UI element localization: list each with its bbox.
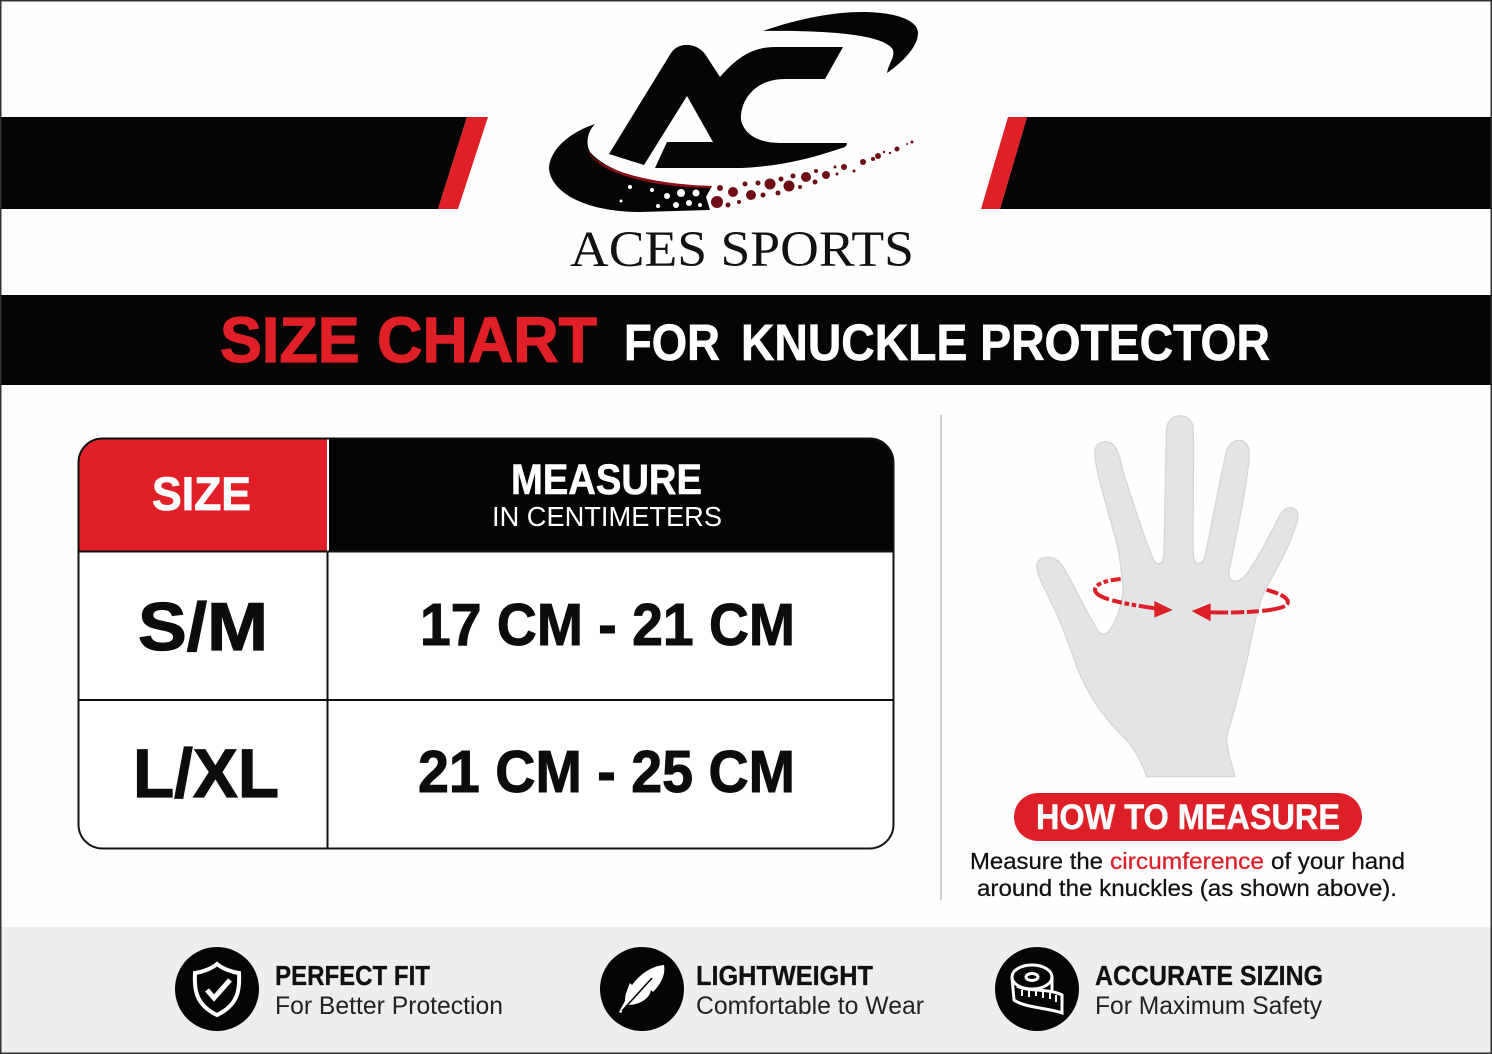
left header stripe [0,117,488,209]
measure instructions: around the knuckles (as shown above). [977,875,1397,901]
header cell: size: SIZE [152,467,251,520]
title: knuckle protector: KNUCKLE PROTECTOR [741,314,1270,371]
logo red dots [711,140,914,208]
row: L/XL [133,735,795,812]
row: L/XL: L/XL [133,735,279,812]
row: S/M: 17 CM - 21 CM [420,592,795,658]
how to measure pill: HOW TO MEASURE [1036,798,1340,837]
logo lower swoosh [549,124,712,212]
logo: Aces Sports [549,12,918,278]
size table [78,438,894,849]
header cell: measure: MEASURE [511,456,702,504]
feature: lightweight: LIGHTWEIGHT [696,960,873,991]
measuring arrow: left [1095,579,1173,618]
right header stripe [981,117,1492,209]
footer band background [0,927,1492,1054]
header cell: measure: IN CENTIMETERS [492,501,722,532]
measuring arrow: right [1192,590,1288,621]
header cell: measure [329,439,893,551]
row: S/M: S/M [138,589,268,665]
measure instructions: Measure the [970,848,1103,874]
icon: shield check [175,947,259,1031]
measure instructions [970,848,1405,901]
table body [78,438,894,848]
row: L/XL: 21 CM - 25 CM [418,739,795,805]
vertical divider [940,415,942,900]
feature: perfect fit: For Better Protection [275,992,503,1020]
feature: perfect fit [175,947,503,1031]
logo AC monogram [609,45,847,168]
icon: measuring tape [995,947,1079,1031]
hand illustration [1037,416,1298,777]
title banner [0,295,1492,385]
feature: accurate sizing [995,947,1323,1031]
hand silhouette [1037,416,1298,777]
feature: lightweight [600,947,924,1031]
logo white dots [620,185,702,208]
table outline and grid [78,438,894,849]
measure instructions: of your hand [1271,848,1405,874]
measure instructions: circumference [1110,848,1264,874]
logo upper swoosh [763,12,918,73]
header cell: size [79,439,327,551]
feature: lightweight: Comfortable to Wear [696,992,924,1020]
feature: accurate sizing: ACCURATE SIZING [1095,960,1323,991]
title: size chart: SIZE CHART [220,304,597,376]
title: for: FOR [624,314,720,371]
logo wordmark: ACES SPORTS [570,222,914,278]
feature: accurate sizing: For Maximum Safety [1095,992,1322,1020]
icon: feather [600,947,684,1031]
row: S/M [138,589,795,665]
feature: perfect fit: PERFECT FIT [275,960,430,991]
